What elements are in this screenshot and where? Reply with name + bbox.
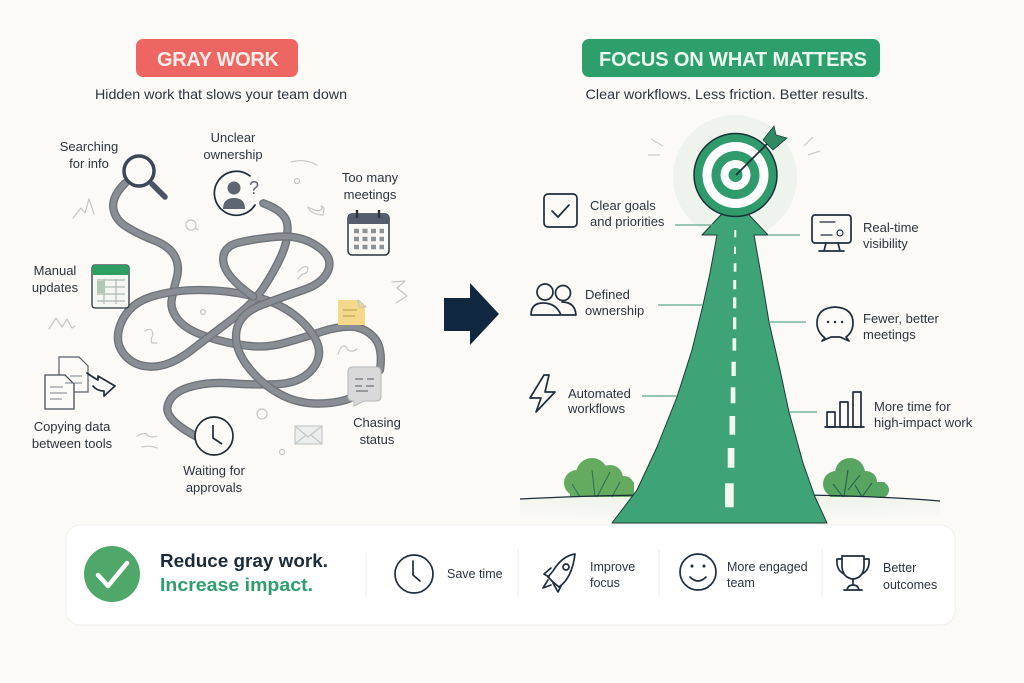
icon: save time clock [395,555,433,593]
label: chasing status: Chasing [353,415,401,430]
label: copying data between tools [32,419,113,451]
label: copying data between tools: between tools [32,436,113,451]
badge: focus on what matters: FOCUS ON WHAT MATTERS [599,49,867,71]
label: more engaged team: More engaged [727,560,808,574]
badge: gray work: GRAY WORK [157,49,280,71]
label: save time: Save time [447,567,503,581]
dart [736,126,787,175]
badge: gray work [136,39,298,77]
label: defined ownership [585,287,644,318]
label: chasing status: status [360,432,395,447]
target [694,126,787,216]
icon: two people [531,284,576,315]
icon: check circle [84,546,140,602]
subtitle: gray work: Hidden work that slows your team down [95,86,347,102]
label: better outcomes: outcomes [883,578,937,592]
label: clear goals: and priorities [590,214,665,229]
label: improve focus: Improve [590,560,635,574]
label: more engaged team [727,560,808,590]
label: high-impact work: high-impact work [874,415,973,430]
icon: speech bubble [817,307,853,341]
icon: envelope [295,426,322,444]
label: unclear ownership: ownership [203,147,263,162]
icon: spreadsheet [92,265,129,308]
label: real-time visibility [863,220,919,251]
icon: smiley [680,554,716,590]
label: real-time visibility: visibility [863,236,908,251]
label: high-impact work: More time for [874,399,951,414]
label: defined ownership: ownership [585,303,644,318]
icon: rocket [543,554,575,592]
label: manual updates: updates [32,280,79,295]
icon: bar chart [825,392,864,427]
label: real-time visibility: Real-time [863,220,919,235]
arrow: transition [444,283,499,345]
label: automated workflows: workflows [567,401,626,416]
badge: focus on what matters [582,39,880,77]
label: fewer, better meetings: Fewer, better [863,311,940,326]
label: high-impact work [874,399,973,430]
panel: gray work header [95,39,347,102]
road arrow [612,200,827,523]
decorative doodles [49,161,407,454]
label: waiting for approvals [183,463,245,495]
panel: summary bar [66,525,955,625]
label: automated workflows: Automated [568,386,631,401]
icon: clock [195,417,233,455]
label: unclear ownership [203,130,263,162]
label: unclear ownership: Unclear [211,130,256,145]
icon: unclear owner: ? [249,178,259,198]
icon: documents and arrow [45,357,115,409]
icon: unclear owner [214,171,259,215]
label: searching for info: for info [69,156,109,171]
label: too many meetings: meetings [344,187,397,202]
bush: left [564,458,634,497]
label: searching for info [60,139,118,171]
label: improve focus [590,560,635,590]
connector lines [642,225,817,412]
callout: reduce gray work: Reduce gray work. [160,551,328,571]
label: too many meetings: Too many [342,170,399,185]
callout: reduce gray work: Increase impact. [160,575,313,595]
label: fewer, better meetings [863,311,940,342]
icon: magnifier [124,156,165,197]
bush: right [823,458,889,498]
label: better outcomes: Better [883,561,916,575]
label: clear goals: Clear goals [590,198,656,213]
road dashes [725,230,736,507]
panel: focus header [582,39,880,102]
label: fewer, better meetings: meetings [863,327,916,342]
icon: chat bubble [348,367,381,406]
callout: reduce gray work [160,551,328,595]
icon: monitor [812,215,851,251]
label: better outcomes [883,561,937,592]
subtitle: focus: Clear workflows. Less friction. Better results. [586,86,868,102]
label: improve focus: focus [590,576,620,590]
label: clear goals [590,198,665,229]
label: copying data between tools: Copying data [34,419,111,434]
label: chasing status [353,415,401,447]
halo and sparks [648,115,820,239]
icon: trophy [837,556,869,590]
label: manual updates [32,263,79,295]
label: waiting for approvals: approvals [186,480,243,495]
icon: lightning [530,375,555,412]
label: too many meetings [342,170,399,202]
ground shading [520,495,940,525]
label: waiting for approvals: Waiting for [183,463,245,478]
icon: sticky note [338,300,366,325]
label: manual updates: Manual [34,263,76,278]
icon: calendar [348,210,389,255]
label: defined ownership: Defined [585,287,630,302]
label: automated workflows [567,386,631,416]
label: more engaged team: team [727,576,755,590]
label: searching for info: Searching [60,139,118,154]
icon: checkbox [544,194,577,227]
ground line [520,495,940,501]
tangled path [113,183,381,437]
